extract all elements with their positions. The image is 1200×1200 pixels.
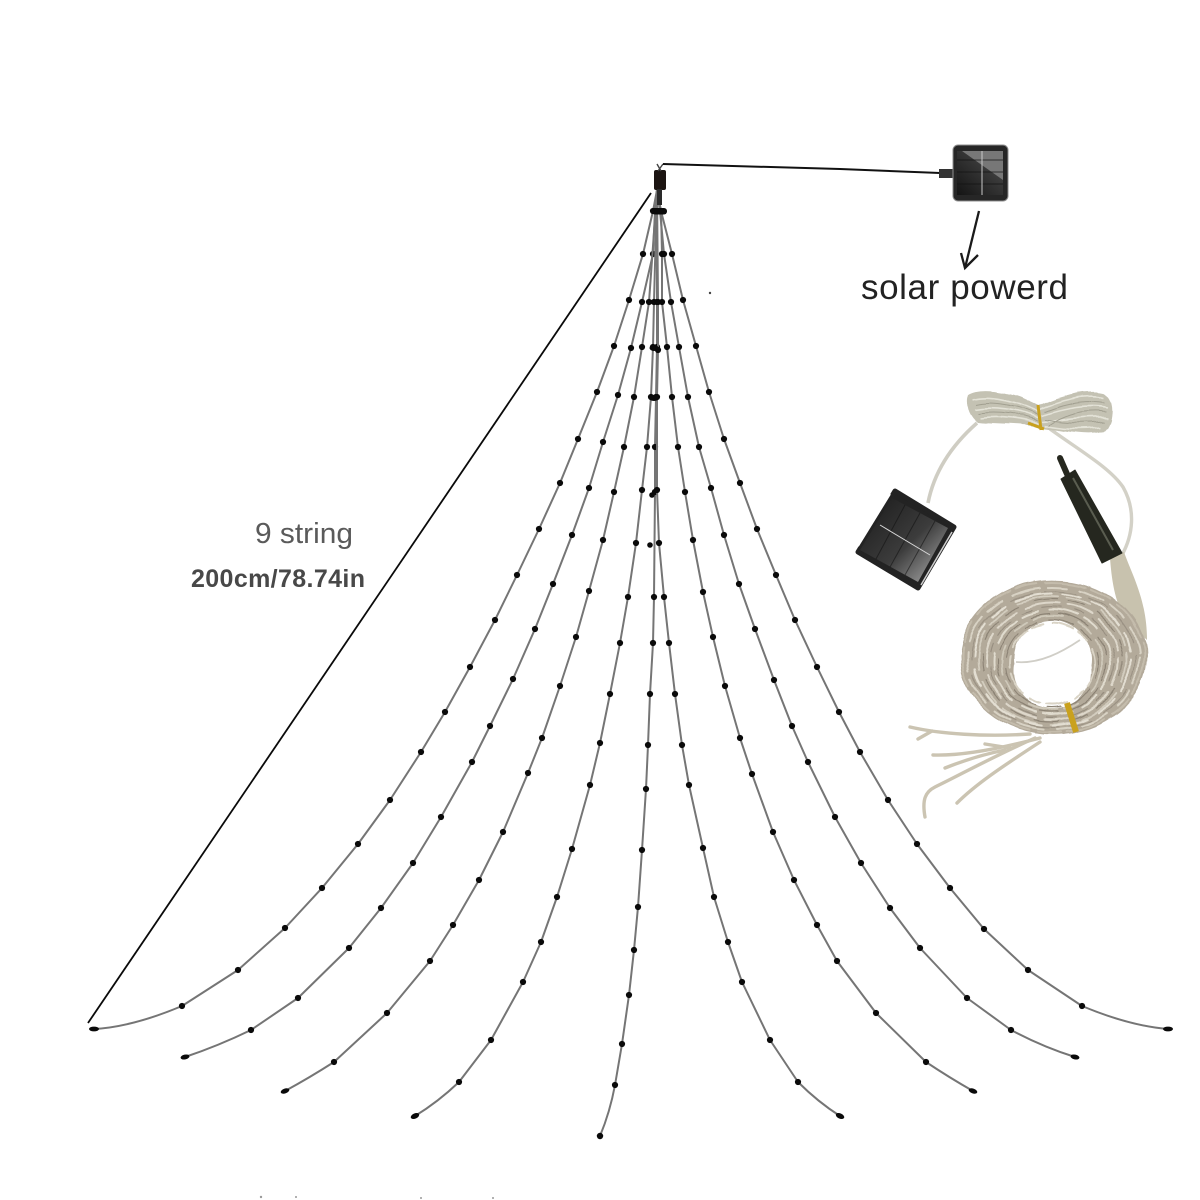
string 8 [657,190,1080,1060]
string 2 [180,190,657,1060]
stray wire through coil hole [1016,640,1080,662]
gold tie on coil [1067,703,1076,732]
gold tie on bundle [1028,405,1044,430]
cable from panel to bundle [928,423,977,503]
product photo [858,391,1147,817]
black controller [1060,458,1122,563]
cable to solar panel [663,164,940,173]
arrow down to label [961,211,979,268]
label: solar powered: solar powerd [861,268,1068,307]
text: length: 200cm/78.74in [191,565,365,593]
string 7 [657,190,978,1095]
dimension line [88,193,651,1023]
controller box at the top of the strings [654,164,666,205]
string 1 [89,190,657,1031]
cable from bundle to controller [1050,429,1132,555]
large coil of wires [960,580,1147,734]
clustered bulbs near centre [647,208,667,548]
string 3 [280,190,657,1095]
string 9 [657,190,1173,1031]
string light diagram [89,190,1173,1139]
small wire bundle [967,391,1112,434]
string 4 [410,190,657,1120]
string 6 [657,190,845,1120]
icon: large solar panel [858,491,954,588]
wires leaving the controller [1110,552,1147,640]
loose wire ends [910,727,1040,817]
string 5 [597,190,657,1139]
icon: small solar panel [939,145,1008,201]
image specks [260,292,711,1199]
text: 9 string: 9 string [255,518,353,550]
